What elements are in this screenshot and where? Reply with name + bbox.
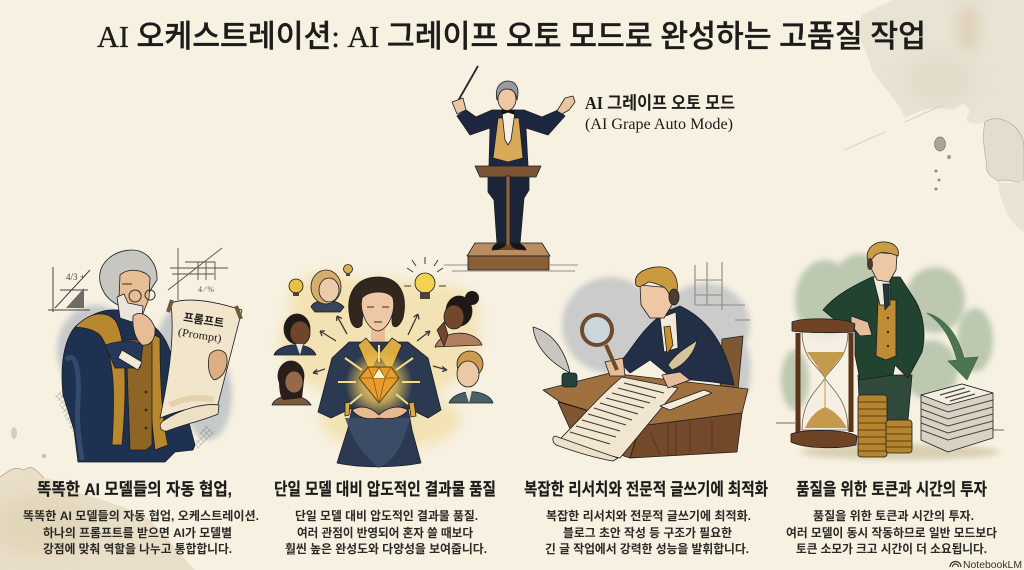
tie <box>883 284 889 310</box>
jacket <box>823 277 924 380</box>
panel: research and writing <box>524 262 768 556</box>
side label: AI Grape Auto Mode <box>585 93 735 133</box>
side label: AI Grape Auto Mode: (AI Grape Auto Mode) <box>585 116 733 133</box>
gold cuffs <box>345 402 416 417</box>
neck <box>371 325 385 341</box>
panel: smart AI collaboration <box>23 248 259 556</box>
hands <box>452 96 575 114</box>
illustration: conductor on podium <box>444 66 578 271</box>
small paper <box>660 390 712 410</box>
sleeve <box>105 341 143 368</box>
math chart left <box>48 267 90 312</box>
math chart right: 4 ⁄ % <box>198 285 214 294</box>
illustration: writer at desk <box>533 262 751 461</box>
person: woman with bun <box>435 291 482 347</box>
floor shadow <box>444 265 578 271</box>
body text: 품질을 위한 토큰과 시간의 투자. <box>813 508 974 523</box>
trousers <box>858 375 912 420</box>
panel: token and time investment <box>776 242 1004 556</box>
scroll text: 프롬프트 (Prompt) <box>177 311 225 345</box>
heading: 품질을 위한 토큰과 시간의 투자 <box>796 480 987 499</box>
hourglass <box>791 319 857 448</box>
body text: 여러 모델이 동시 작동하므로 일반 모드보다 <box>786 525 997 540</box>
body text: 토큰 소모가 크고 시간이 더 소요됩니다. <box>796 541 987 556</box>
gold collar <box>358 338 402 372</box>
vest <box>493 118 523 162</box>
face <box>119 270 150 316</box>
scroll <box>160 300 242 418</box>
heading: 복잡한 리서치와 전문적 글쓰기에 최적화 <box>524 480 768 499</box>
body text: 여러 관점이 반영되어 혼자 쓸 때보다 <box>297 525 473 540</box>
desk <box>543 373 748 426</box>
body text: 훨씬 높은 완성도와 다양성을 보여줍니다. <box>285 541 487 556</box>
hair <box>635 267 677 298</box>
gray wash <box>57 305 232 440</box>
shirt <box>660 312 678 352</box>
water stain: bottom left <box>0 427 195 570</box>
hair <box>100 250 157 305</box>
hands <box>605 358 690 388</box>
body text: 긴 글 작업에서 강력한 성능을 발휘합니다. <box>545 541 749 556</box>
hand on hourglass <box>851 316 872 336</box>
shirt <box>873 277 890 305</box>
headphone <box>669 289 679 305</box>
glow <box>345 350 413 418</box>
face <box>640 285 672 318</box>
gray wash <box>562 277 751 400</box>
head <box>498 88 516 110</box>
gold stole <box>75 314 125 445</box>
paper stack <box>921 384 993 452</box>
headphone band <box>867 258 873 270</box>
quill on inkwell <box>533 327 570 373</box>
heading: 똑똑한 AI 모델들의 자동 협업, <box>37 480 232 499</box>
suit <box>620 306 734 385</box>
panel: overwhelming quality <box>272 257 496 556</box>
heading: 단일 모델 대비 압도적인 결과물 품질 <box>274 480 496 499</box>
robe <box>62 310 195 462</box>
glasses <box>122 284 155 302</box>
person: woman with dark hair <box>272 361 311 405</box>
person: blonde man <box>449 351 493 403</box>
title: AI 오케스트레이션: AI 그레이프 오토 모드로 완성하는 고품질 작업 <box>97 19 926 54</box>
body text: 똑똑한 AI 모델들의 자동 협업, 오케스트레이션. <box>23 508 259 523</box>
scroll text: 프롬프트 (Prompt): 프롬프트 <box>182 311 225 330</box>
long paper <box>556 377 678 458</box>
body text: 강점에 맞춰 역할을 나누고 통합합니다. <box>43 541 232 556</box>
writing quill <box>668 340 697 370</box>
dress <box>318 342 441 467</box>
green wash <box>781 254 993 410</box>
tie <box>664 326 673 354</box>
face <box>870 252 897 282</box>
lectern <box>475 166 541 250</box>
shoes <box>492 243 526 250</box>
math chart right <box>168 248 228 300</box>
tail coat and trousers <box>488 167 529 244</box>
green arrow <box>927 313 978 380</box>
podium <box>467 243 550 270</box>
side label: AI Grape Auto Mode: AI 그레이프 오토 모드 <box>585 93 735 113</box>
thinking hand <box>133 313 155 345</box>
light bulbs <box>289 257 446 299</box>
body text: 복잡한 리서치와 전문적 글쓰기에 최적화. <box>546 508 751 523</box>
body text <box>23 508 259 556</box>
math chart left: 4/3 + <box>66 272 85 282</box>
magnifier <box>582 315 612 345</box>
desk grain <box>650 420 712 456</box>
coat and arms <box>457 110 565 166</box>
body text: 단일 모델 대비 압도적인 결과물 품질. <box>295 508 478 523</box>
body text <box>285 508 487 556</box>
person: blonde woman <box>311 270 344 312</box>
shirt <box>502 112 515 145</box>
vest <box>126 340 152 450</box>
person: bearded man <box>274 314 316 355</box>
window sketch <box>695 262 750 320</box>
hair <box>349 277 404 328</box>
ground line and shadow <box>800 444 1000 460</box>
body text: 하나의 프롬프트를 받으면 AI가 모델별 <box>43 525 232 540</box>
hair <box>496 81 518 100</box>
body text <box>786 508 997 556</box>
coin stacks <box>858 395 912 457</box>
hand on scroll <box>208 350 227 380</box>
face <box>361 292 394 331</box>
bow tie <box>502 110 514 114</box>
beard <box>117 294 143 322</box>
water stain: top right <box>844 0 1024 232</box>
illustration: man with hourglass coins and papers <box>776 242 1004 460</box>
inkwell <box>562 373 577 387</box>
crosshatch shading <box>55 385 78 445</box>
body text: 블로그 초안 작성 등 구조가 필요한 <box>563 525 732 540</box>
arrows to people <box>313 314 447 374</box>
paper text lines <box>570 383 664 444</box>
cupped hands <box>352 407 408 419</box>
illustration: professor with prompt scroll <box>48 248 242 462</box>
body text <box>545 508 751 556</box>
illustration: woman with glowing diamond and people <box>272 257 493 468</box>
chair <box>720 336 743 390</box>
baton <box>458 66 478 101</box>
yellow wash <box>280 272 480 450</box>
scroll text: 프롬프트 (Prompt): (Prompt) <box>177 326 223 345</box>
vest <box>876 300 896 360</box>
diamond <box>359 367 399 403</box>
hair <box>867 242 898 262</box>
